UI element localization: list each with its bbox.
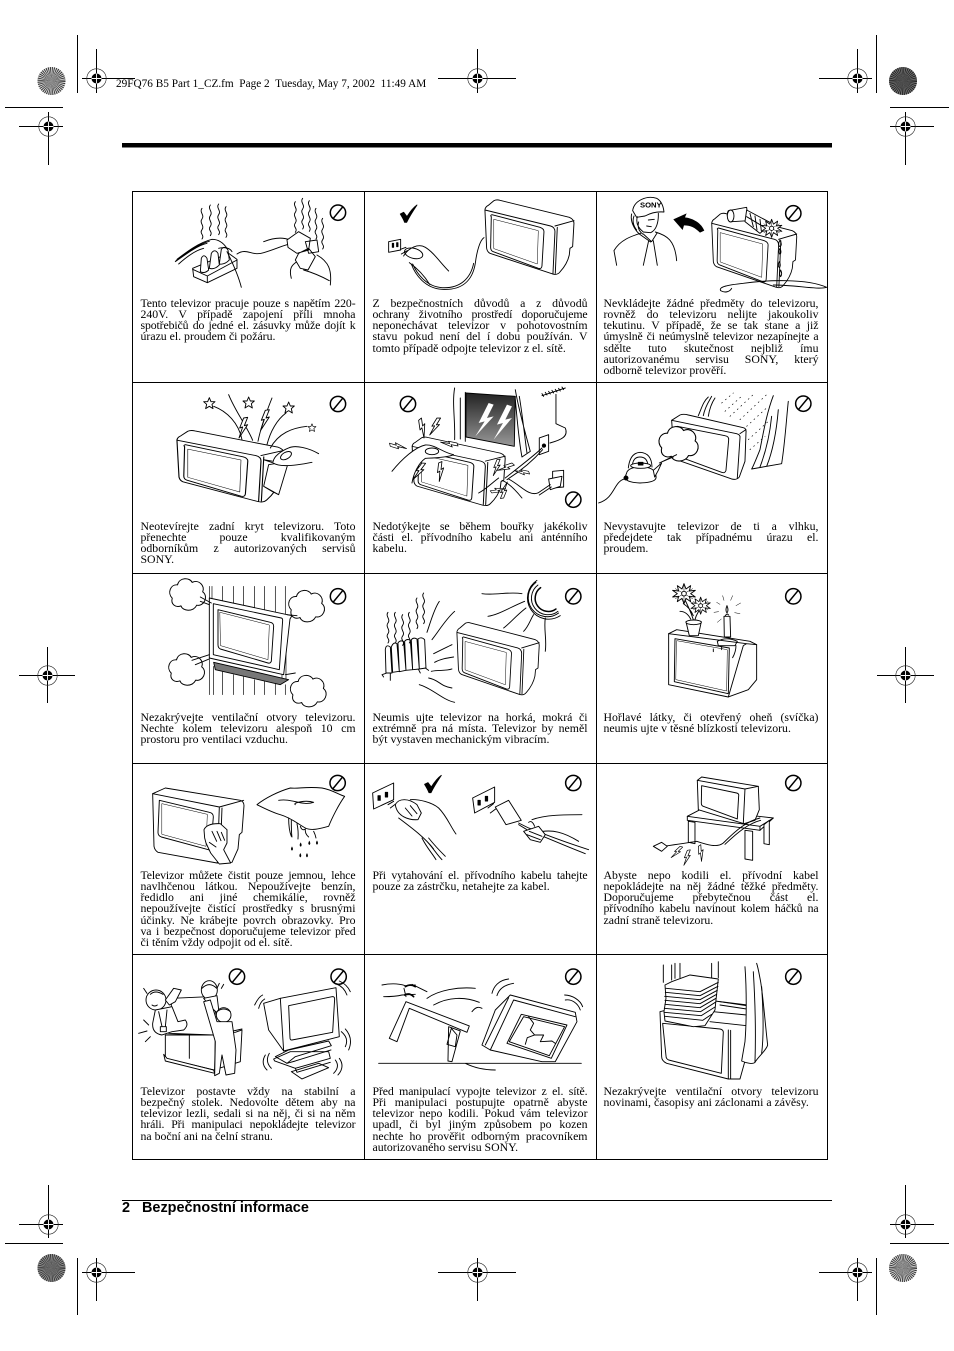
caption: nechte ho prověřit odborným pracovníkem bbox=[372, 1129, 588, 1143]
cord bbox=[237, 243, 292, 254]
caption bbox=[604, 868, 818, 927]
wall socket wrong bbox=[473, 787, 495, 813]
caption bbox=[140, 296, 356, 343]
no icon bbox=[566, 775, 581, 791]
panel: no objects or liquids bbox=[604, 196, 827, 377]
caption: přenechte pouze kvalifikovaným bbox=[140, 530, 356, 544]
caption: tomto případě odpojte televizor z el. sítě. bbox=[372, 341, 566, 355]
vase and flower bbox=[727, 207, 782, 237]
caption: Televizor můžete čistit pouze jemnou, lehce bbox=[140, 868, 356, 882]
drips and puddle bbox=[720, 240, 827, 292]
illustration: children climbing and unstable TV bbox=[138, 968, 351, 1080]
caption: úrazu el. proudem či požáru. bbox=[140, 329, 275, 343]
heat waves bbox=[201, 198, 324, 249]
caption: nepokládejte na něj žádné těžké předměty. bbox=[604, 879, 818, 893]
television bbox=[669, 630, 757, 697]
top rule bbox=[122, 143, 832, 148]
check mark bbox=[425, 775, 441, 793]
magazine stack bbox=[664, 975, 718, 1027]
caption bbox=[372, 868, 588, 893]
hand on TV bbox=[389, 417, 458, 483]
caption: zadní straně televizoru. bbox=[604, 913, 713, 927]
illustration: opening rear cover with sparks bbox=[176, 394, 346, 502]
text: Bezpečnostní informace bbox=[142, 1200, 309, 1216]
candle bbox=[713, 596, 741, 658]
service technician: SONY bbox=[640, 200, 662, 209]
curtain back bbox=[663, 962, 718, 982]
caption: Nevkládejte žádné předměty do televizoru, bbox=[604, 296, 818, 310]
caption bbox=[372, 296, 588, 355]
no icon top bbox=[400, 396, 416, 412]
caption: upadl, či byl jiným způsobem po kozen bbox=[372, 1117, 588, 1131]
caption bbox=[604, 1086, 818, 1108]
illustration: TV in niche with blocked vents bbox=[168, 578, 346, 708]
adapter cluster bbox=[264, 232, 331, 285]
television bbox=[485, 200, 574, 274]
caption: odborně televizor prověří. bbox=[604, 363, 726, 377]
caption: Neotevírejte zadní kryt televizoru. Toto bbox=[140, 518, 356, 532]
television bbox=[177, 431, 284, 502]
caption bbox=[372, 710, 588, 746]
file slug header: 29FQ76 B5 Part 1_CZ.fm Page 2 Tuesday, May 7, 2002 11:49 AM bbox=[116, 78, 426, 90]
caption: autorizovanému servisu SONY, který bbox=[604, 352, 818, 366]
panel: power cord damage bbox=[604, 774, 818, 927]
curtains bbox=[698, 396, 788, 469]
service technician bbox=[614, 197, 677, 265]
caption: pouze za zástrčku, netahejte za kabel. bbox=[372, 879, 550, 893]
illustration: kettle steam and rain bbox=[598, 392, 812, 504]
caption: extrémně pra ná místa. Televizor by neměl bbox=[372, 721, 588, 735]
illustration: correct and wrong unplugging bbox=[372, 774, 590, 860]
caption: Nedotýkejte se během bouřky jakékoliv bbox=[372, 518, 588, 532]
wall socket correct bbox=[373, 783, 394, 809]
caption: předejdete tak případnému úrazu el. bbox=[604, 530, 818, 544]
vertical wall slats bbox=[209, 586, 286, 695]
caption bbox=[140, 518, 356, 566]
arrow bbox=[673, 213, 704, 233]
dripping cloth bbox=[257, 787, 345, 839]
no icon right bbox=[331, 969, 346, 984]
no icon bbox=[786, 589, 801, 604]
illustration: service call and spilled vase bbox=[614, 196, 827, 292]
rain bbox=[722, 393, 768, 450]
illustration: radiator, sun and TV bbox=[382, 580, 582, 703]
caption: stavu pokud není del í dobu používán. V bbox=[372, 329, 588, 343]
footer rule bbox=[122, 1200, 832, 1201]
no icon bbox=[786, 206, 801, 221]
caption: bezpečný stolek. Nedovolte dětem aby na bbox=[140, 1095, 356, 1109]
cable with plug bbox=[653, 818, 761, 851]
caption: Neumis ujte televizor na horká, mokrá či bbox=[372, 710, 588, 724]
caption: nepoužívejte čistící prostředky s brusnými bbox=[140, 901, 356, 915]
television on cabinet bbox=[169, 997, 216, 1035]
motion marks bbox=[255, 981, 351, 1075]
caption: prostoru pro ventilaci vzduchu. bbox=[140, 732, 288, 746]
no icon bbox=[330, 589, 346, 604]
caption: autorizovaného servisu SONY. bbox=[372, 1140, 518, 1154]
heat waves bbox=[387, 593, 455, 702]
panel: do not open back cover bbox=[140, 394, 356, 566]
illustration: hand unplugging TV bbox=[388, 199, 574, 290]
no icon bbox=[786, 775, 801, 791]
hand with screwdriver bbox=[264, 447, 319, 466]
caption: spotřebičů do jedné el. zásuvky může dojít k bbox=[140, 318, 356, 332]
caption: Hořlavé látky, či otevřený oheň (svíčka) bbox=[604, 710, 818, 724]
check mark bbox=[400, 205, 417, 222]
no icon bbox=[330, 396, 346, 412]
correct hand on plug bbox=[388, 800, 456, 860]
caption: navlhčenou látkou. Nepoužívejte benzín, bbox=[140, 879, 356, 893]
caption bbox=[604, 710, 818, 735]
table grid bbox=[132, 192, 828, 1160]
tipped table bbox=[389, 1002, 469, 1062]
caption: rovněž do televizoru nelijte jakoukoliv bbox=[604, 307, 818, 321]
caption bbox=[140, 868, 356, 949]
sparks bbox=[204, 395, 316, 448]
stand bbox=[687, 810, 773, 860]
panel: overloaded socket bbox=[140, 198, 356, 343]
television bbox=[672, 414, 746, 479]
caption bbox=[140, 710, 356, 746]
caption: či těním vždy odpojit od el. sítě. bbox=[140, 935, 293, 949]
caption: Doporučujeme přebytečnou část el. bbox=[604, 890, 818, 904]
hands bbox=[382, 984, 427, 997]
no icon bbox=[566, 969, 581, 984]
wall socket bbox=[389, 239, 401, 252]
caption: novinami, časopisy ani záclonami a závěsy. bbox=[604, 1095, 809, 1109]
caption: neponechávat televizor v pohotovostním bbox=[372, 318, 588, 332]
radiator bbox=[382, 638, 429, 680]
caption: účinky. Ne krábejte povrch obrazovky. Pro bbox=[140, 913, 356, 927]
no icon bbox=[796, 396, 811, 411]
caption: televizor lezli, sedali si na něj, či si na něm bbox=[140, 1106, 356, 1120]
caption: tekutinu. V případě, že se tak stane a již bbox=[604, 318, 818, 332]
caption: neumis ujte v těsné blízkosti televizoru. bbox=[604, 721, 791, 735]
mains plug bbox=[479, 470, 564, 498]
floor bbox=[379, 1063, 581, 1070]
panel: do not cover vents bbox=[140, 578, 356, 746]
caption: Nevystavujte televizor de ti a vlhku, bbox=[604, 518, 818, 532]
curtain front bbox=[742, 963, 768, 1063]
open back panel bbox=[264, 461, 289, 495]
panel: unplug when idle bbox=[372, 199, 588, 355]
caption bbox=[604, 518, 818, 555]
caption: kabelu. bbox=[372, 541, 407, 555]
panel: flammable items bbox=[604, 583, 818, 735]
caption bbox=[604, 296, 818, 377]
television bbox=[660, 1000, 747, 1079]
caption: části el. přívodního kabelu ani anténního bbox=[372, 530, 588, 544]
panel: handling and damage bbox=[372, 968, 588, 1154]
antenna bbox=[542, 387, 566, 443]
candle glow bbox=[714, 596, 741, 622]
caption: ředidlo ani jiné chemikálie, rovněž bbox=[140, 890, 356, 904]
cabinet bbox=[164, 1029, 242, 1073]
caption: úmyslně či neúmyslně televizor nezapínejte a bbox=[604, 329, 818, 343]
caption: ochrany životního prostředí doporučujeme bbox=[372, 307, 588, 321]
television bbox=[712, 213, 797, 288]
caption: Před manipulací vypojte televizor z el. sítě. bbox=[372, 1084, 588, 1098]
caption bbox=[372, 1086, 588, 1153]
caption bbox=[372, 518, 588, 555]
illustration: overloaded power strip bbox=[174, 198, 346, 288]
caption: Nechte kolem televizoru alespoň 10 cm bbox=[140, 721, 356, 735]
caption: odborníkům z autorizovaných servisů bbox=[140, 541, 356, 555]
panel: stable placement bbox=[138, 968, 356, 1143]
broken TV bbox=[482, 995, 577, 1062]
illustration: TV with flowerpot and candle bbox=[668, 583, 802, 698]
hand and cord bbox=[401, 238, 484, 289]
caption: Z bezpečnostních důvodů a z důvodů bbox=[372, 296, 588, 310]
television bbox=[209, 598, 292, 675]
illustration: TV on stand crushing cord bbox=[652, 774, 802, 866]
caption: Abyste nepo kodili el. přívodní kabel bbox=[604, 868, 818, 882]
caption: přívodního kabelu navinout kolem háčků na bbox=[604, 901, 818, 915]
illustration: wiping TV and dripping cloth bbox=[152, 774, 346, 864]
caption: Tento televizor pracuje pouze s napětím 220- bbox=[140, 296, 356, 310]
caption: 240V. V případě zapojení příli mnoha bbox=[140, 307, 356, 321]
no icon bbox=[566, 589, 581, 604]
no icon bbox=[786, 969, 801, 984]
aerial wall plate bbox=[505, 435, 549, 480]
caption: SONY. bbox=[140, 552, 174, 566]
steam cloud bbox=[659, 427, 698, 463]
steam clouds bbox=[169, 579, 326, 707]
flower pot bbox=[673, 584, 710, 636]
caption: hráli. Při manipulaci nepokládejte televizor bbox=[140, 1117, 356, 1131]
panel: no rain or moisture bbox=[598, 392, 818, 555]
hand with cloth bbox=[204, 824, 231, 864]
sparks bbox=[490, 459, 530, 499]
no icon bottom bbox=[566, 492, 581, 507]
window with lightning bbox=[454, 388, 530, 457]
no icon bbox=[330, 775, 345, 791]
vent hatch bbox=[214, 662, 289, 685]
caption: Při manipulaci postupujte opatrně abyste bbox=[372, 1095, 588, 1109]
no icon bbox=[330, 205, 346, 220]
child left bbox=[139, 988, 187, 1042]
panel: heat and sun bbox=[372, 580, 588, 746]
caption: Nezakrývejte ventilační otvory televizoru. bbox=[140, 710, 356, 724]
caption: televizor nepo kodili. Pokud vám televizor bbox=[372, 1106, 588, 1120]
wrong plug and hand bbox=[488, 800, 589, 854]
panel: no magazines or curtains on TV bbox=[596, 955, 828, 1160]
power strip bbox=[175, 239, 241, 287]
caption: Nezakrývejte ventilační otvory televizoru bbox=[604, 1084, 818, 1098]
television bbox=[153, 788, 244, 863]
caption: být vystaven mechanickým vibracím. bbox=[372, 732, 549, 746]
television bbox=[697, 777, 759, 824]
child right bbox=[201, 981, 236, 1076]
illustration: magazines and curtains covering TV bbox=[596, 955, 828, 1160]
motion lines bbox=[427, 979, 583, 1012]
caption: proudem. bbox=[604, 541, 648, 555]
caption: na boční ani na čelní stranu. bbox=[140, 1129, 273, 1143]
illustration: tipped table and broken TV bbox=[364, 955, 596, 1160]
caption: va i bezpečnost doporučujeme televizor před bbox=[140, 924, 356, 938]
caption: Televizor postavte vždy na stabilní a bbox=[140, 1084, 356, 1098]
kettle bbox=[599, 452, 662, 503]
panel: lightning storm bbox=[372, 386, 588, 555]
page footer: 2 bbox=[122, 1200, 130, 1216]
television shaking bbox=[264, 988, 339, 1051]
caption bbox=[140, 1084, 356, 1143]
television bbox=[412, 437, 505, 506]
caption: Při vytahování el. přívodního kabelu tahejte bbox=[372, 868, 588, 882]
power cord bbox=[599, 479, 624, 503]
sun bbox=[482, 580, 560, 651]
panel: cleaning bbox=[140, 774, 356, 949]
no icon left bbox=[229, 969, 245, 984]
water drops bbox=[291, 840, 318, 857]
books bbox=[274, 1041, 331, 1079]
television bbox=[457, 623, 539, 695]
panel: pull plug not cable bbox=[372, 774, 590, 893]
caption: sdělte tuto skutečnost nejbliž ímu bbox=[604, 341, 818, 355]
sparks bbox=[671, 845, 707, 865]
illustration: storm, TV and cables bbox=[389, 386, 582, 508]
